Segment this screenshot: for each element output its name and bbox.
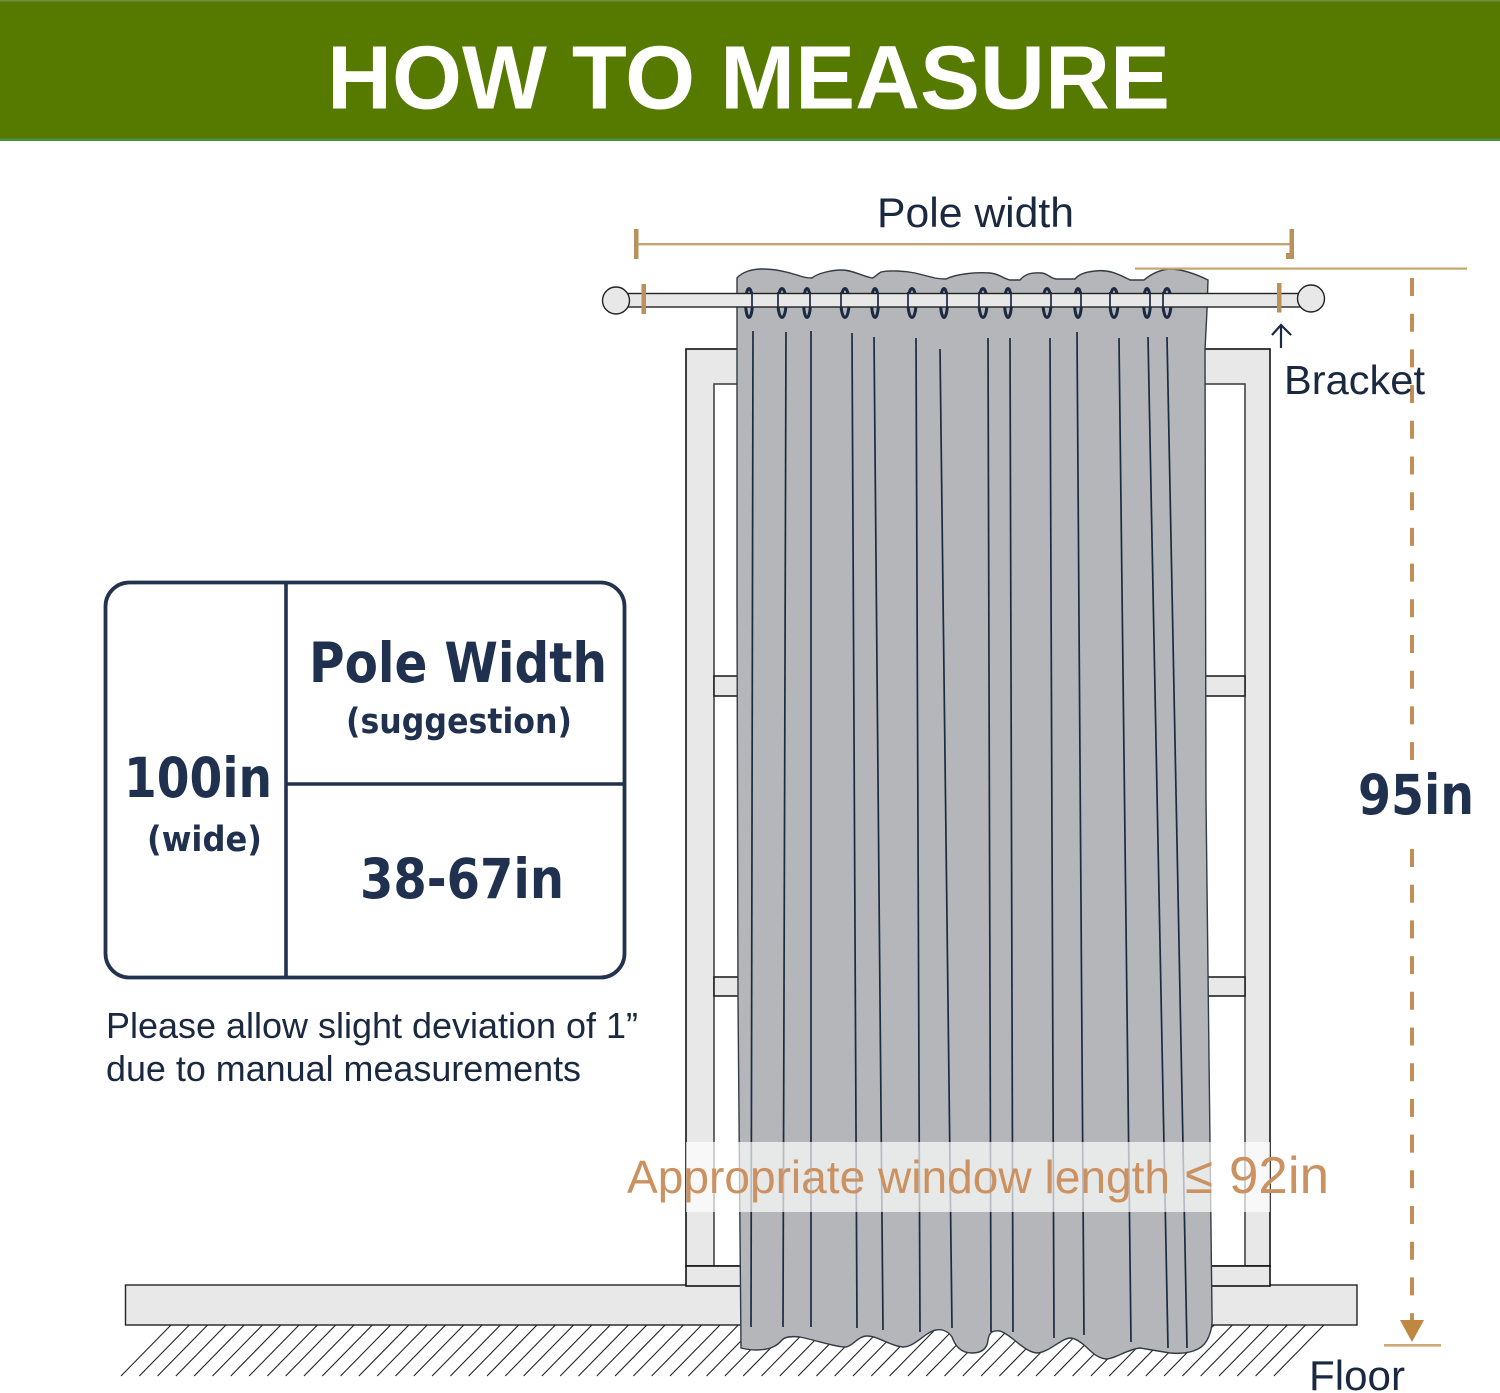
right finial [1298, 285, 1324, 312]
window length callout: Appropriate window length [627, 1151, 1170, 1203]
floor reference line [1384, 1344, 1441, 1347]
pole width label: Pole width [877, 189, 1074, 236]
curtain width value: 100in [124, 746, 272, 810]
title banner: HOW TO MEASURE [327, 28, 1170, 128]
pole width dimension line [634, 229, 1294, 259]
curtain rings front [752, 292, 1163, 308]
height dimension dashed arrow [1400, 278, 1424, 1342]
top of curtain reference line [1135, 268, 1467, 270]
skirting board [126, 1285, 1357, 1325]
window length callout: 92in [1229, 1147, 1329, 1205]
window length callout: ≤ [1185, 1147, 1213, 1205]
height value: 95in [1358, 763, 1474, 827]
deviation note: due to manual measurements [106, 1048, 581, 1089]
curtain rod [602, 285, 1324, 314]
left bracket mark [642, 284, 646, 314]
window frame [686, 349, 1270, 1286]
floor hatching [121, 1325, 1324, 1376]
deviation note [106, 1005, 638, 1089]
bracket label: Bracket [1284, 357, 1426, 403]
pole width range value: 38-67in [360, 847, 564, 911]
title banner [0, 0, 1500, 141]
right bracket mark [1277, 283, 1282, 312]
pole width heading: Pole Width [309, 631, 607, 695]
curtain rings behind rod [746, 288, 1171, 318]
curtain [737, 269, 1212, 1359]
deviation note: Please allow slight deviation of 1” [106, 1005, 638, 1046]
left finial [602, 287, 630, 314]
wide label: (wide) [147, 820, 262, 860]
window length callout [627, 1142, 1329, 1212]
suggestion label: (suggestion) [346, 702, 572, 742]
bracket arrow [1272, 325, 1291, 348]
size table panel [106, 582, 624, 978]
curtain pleats [751, 331, 1187, 1348]
